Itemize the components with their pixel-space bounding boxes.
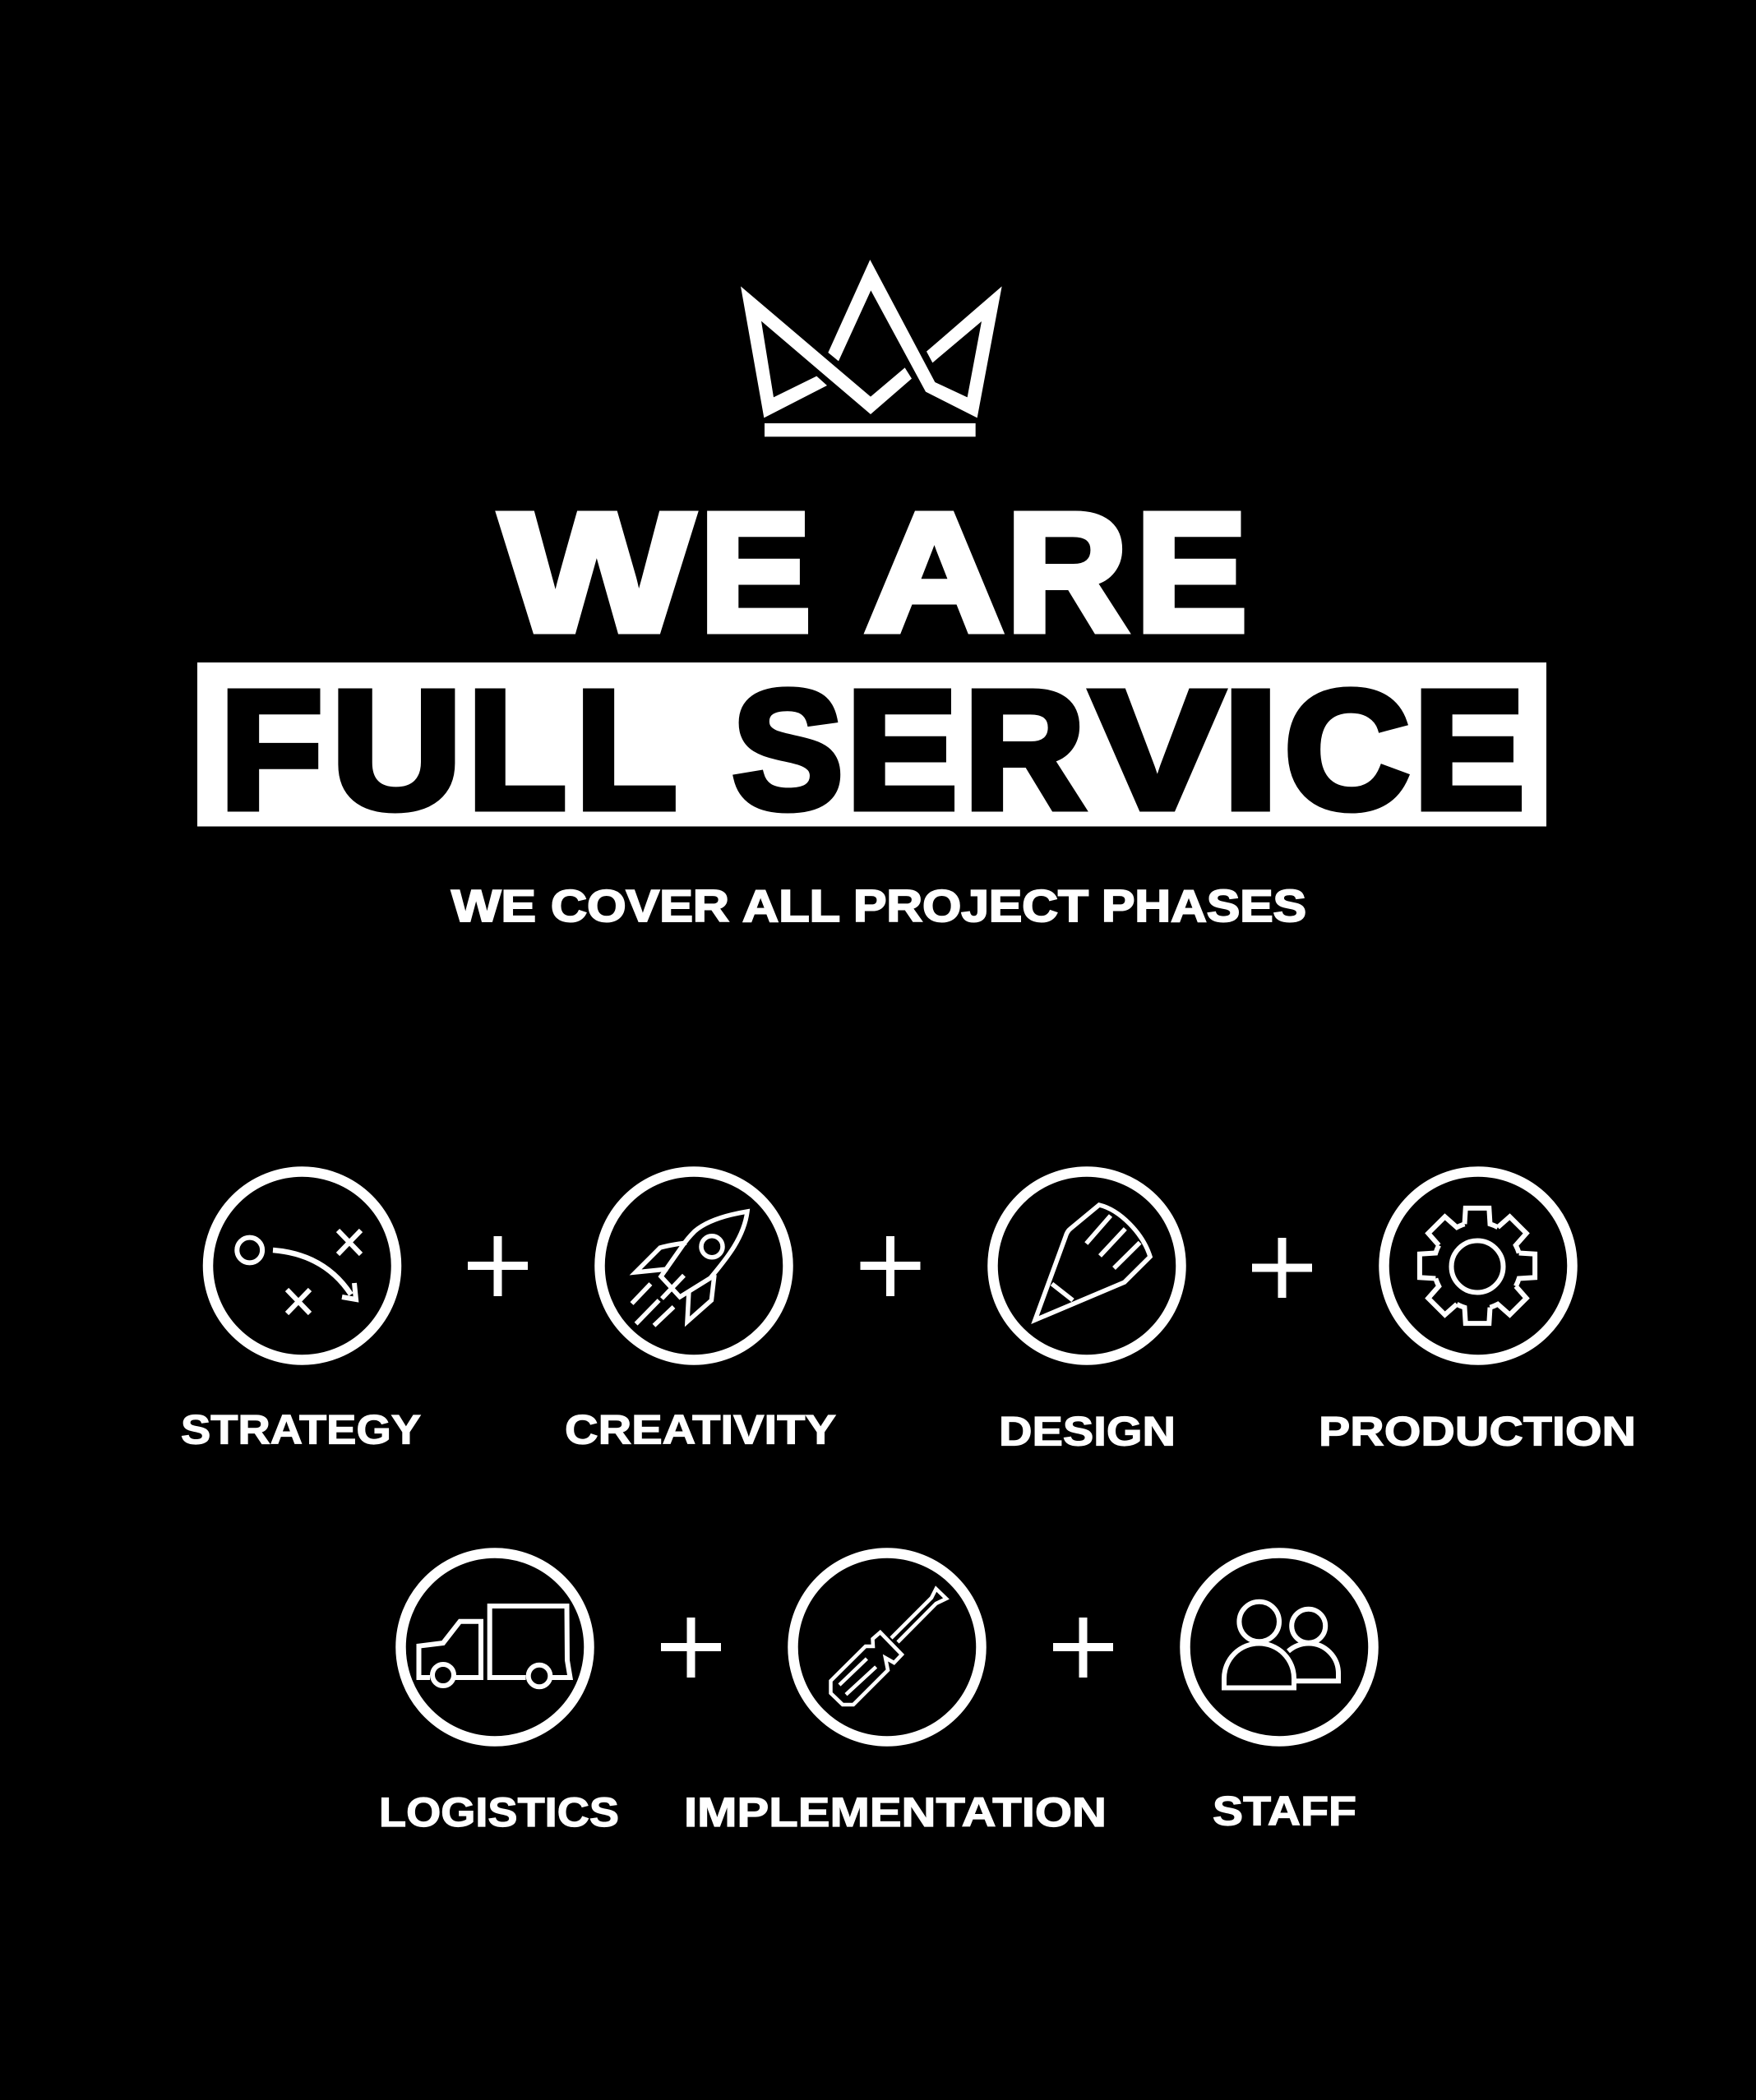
heading: FULL SERVICE highlighted box: U: [331, 656, 462, 844]
label: DESIGN: DESIGN: [999, 1409, 1176, 1455]
heading: WE ARE: E: [700, 478, 811, 667]
label: CREATIVITY: CREATIVITY: [565, 1407, 836, 1453]
plus: [1053, 1618, 1113, 1678]
plus: [1252, 1238, 1312, 1298]
label: IMPLEMENTATION: IMPLEMENTATION: [684, 1789, 1107, 1835]
plus: [860, 1236, 921, 1296]
label: PRODUCTION: PRODUCTION: [1319, 1409, 1636, 1455]
icon: staff people: [1185, 1553, 1373, 1741]
icon: implementation screwdriver: [793, 1553, 982, 1741]
heading: WE ARE: R: [1006, 478, 1128, 667]
heading: FULL SERVICE highlighted box: S: [732, 656, 843, 844]
heading: FULL SERVICE highlighted box: E: [1414, 656, 1524, 844]
heading: WE ARE: A: [865, 478, 1004, 667]
heading: FULL SERVICE highlighted box: I: [1222, 656, 1279, 844]
subheading: COVER: [551, 880, 729, 931]
icon: logistics truck: [401, 1553, 589, 1741]
heading: FULL SERVICE highlighted box: E: [847, 656, 957, 844]
heading: FULL SERVICE highlighted box: L: [468, 656, 566, 844]
label: STRATEGY: STRATEGY: [181, 1407, 421, 1453]
icon: design pencil: [993, 1172, 1181, 1359]
icon: crown logo: [741, 260, 1002, 436]
heading: FULL SERVICE highlighted box: L: [575, 656, 674, 844]
heading: WE ARE: E: [1136, 478, 1247, 667]
heading: WE ARE: W: [501, 478, 694, 667]
heading: FULL SERVICE highlighted box: V: [1091, 656, 1223, 844]
heading: FULL SERVICE highlighted box: R: [964, 656, 1085, 844]
icon: strategy: [208, 1172, 396, 1359]
plus: [661, 1618, 721, 1678]
heading: FULL SERVICE highlighted box: C: [1284, 656, 1410, 844]
icon: production gear: [1384, 1172, 1572, 1359]
plus: [468, 1236, 528, 1296]
subheading: PROJECT: [853, 880, 1088, 931]
heading: FULL SERVICE highlighted box: [197, 656, 1546, 844]
heading: FULL SERVICE highlighted box: F: [220, 656, 322, 844]
label: LOGISTICS: LOGISTICS: [379, 1789, 619, 1835]
icon: creativity rocket: [600, 1172, 788, 1359]
subheading: ALL: [742, 880, 839, 931]
subheading: PHASES: [1102, 880, 1306, 931]
subheading: WE: [451, 880, 536, 931]
label: STAFF: STAFF: [1213, 1788, 1356, 1835]
